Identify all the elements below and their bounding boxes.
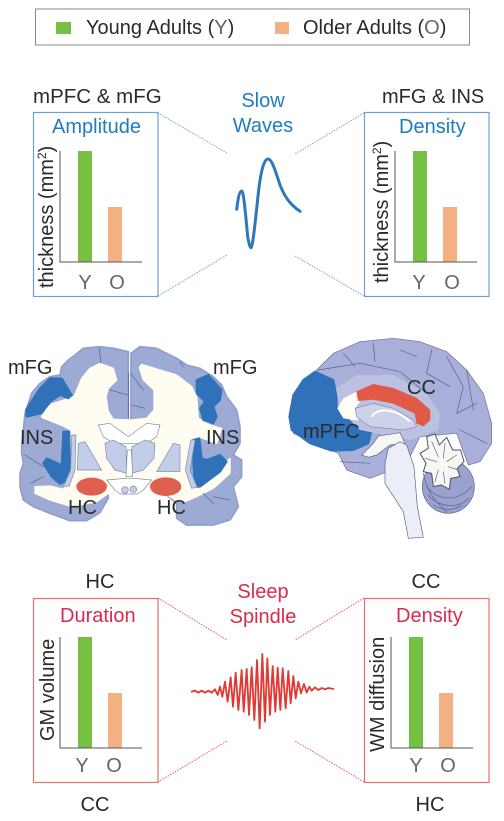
labels on coronal section: mFG: [8, 357, 52, 379]
labels on coronal section: HC: [157, 497, 186, 519]
left insula (blue): [43, 432, 70, 484]
panel: density (slow waves): thickness (mm: [371, 154, 393, 283]
panel: duration: GM volume: [37, 639, 59, 741]
sulci: [25, 348, 230, 503]
icon: slow wave trace: [237, 159, 300, 248]
connector lines: sleep spindle: [158, 598, 364, 782]
right hippocampus (red): [150, 477, 181, 496]
panel: density (slow waves): ): [371, 141, 393, 147]
region label: CC top: CC: [412, 571, 440, 593]
labels on coronal section: mFG: [213, 357, 257, 379]
diencephalon: [355, 403, 417, 430]
panel: amplitude: O: [109, 272, 125, 294]
panel: density (slow waves): O: [444, 272, 460, 294]
panel: density (slow waves): [364, 112, 489, 296]
right white matter: [131, 364, 230, 502]
white genu: [337, 392, 360, 421]
brain: sagittal section: [289, 338, 492, 538]
icon: sleep spindle trace: [192, 654, 333, 728]
heading: sleep spindle: Spindle: [230, 606, 296, 628]
right hemisphere cortex: [131, 347, 242, 525]
brainstem: [385, 442, 423, 538]
region label: mPFC and mFG: mPFC & mFG: [33, 85, 162, 108]
panel: amplitude: ): [36, 146, 58, 152]
panel: density (slow waves): Density: [399, 116, 466, 138]
gyri lines: [318, 343, 487, 463]
cerebellum: [422, 460, 474, 513]
panel: density (spindle): [364, 598, 489, 782]
labels on sagittal section: mPFC: [303, 421, 360, 443]
region label: HC top: HC: [86, 571, 114, 593]
legend: [36, 9, 470, 45]
region label: CC bottom: CC: [81, 794, 109, 816]
right insula (blue): [193, 438, 227, 487]
left middle frontal gyrus (blue): [26, 378, 72, 417]
panel: duration: Duration: [60, 605, 136, 627]
inner band: [336, 375, 440, 440]
region label: mFG and INS: mFG & INS: [382, 86, 484, 108]
left white matter: [35, 363, 129, 507]
heading: slow waves: Waves: [233, 115, 293, 137]
panel: duration: O: [106, 755, 122, 777]
cerebellar white matter: [420, 434, 464, 489]
heading: slow waves: Slow: [241, 90, 285, 112]
panel: density (slow waves): 2: [370, 147, 384, 154]
region label: HC bottom: HC: [416, 794, 444, 816]
deep structures: [63, 423, 197, 494]
panel: amplitude: 2: [35, 152, 49, 159]
labels on coronal section: INS: [206, 427, 239, 449]
left hippocampus (red): [76, 478, 107, 496]
legend: Older Adults (O): [303, 17, 446, 39]
fornix: [372, 410, 410, 422]
labels on coronal section: HC: [68, 497, 97, 519]
panel: amplitude: thickness (mm: [36, 159, 58, 288]
panel: density (slow waves): Y: [412, 272, 426, 294]
panel: density (spindle): O: [440, 755, 456, 777]
panel: duration: Y: [75, 755, 89, 777]
labels on sagittal section: CC: [407, 377, 436, 399]
labels on sagittal section: [303, 377, 436, 443]
legend: Young Adults (Y): [86, 17, 234, 39]
panel: amplitude: Amplitude: [52, 116, 141, 138]
hypothalamic white structure: [362, 433, 405, 457]
panel: amplitude: [34, 112, 158, 296]
labels on coronal section: [8, 357, 257, 519]
medial prefrontal cortex (blue): [289, 372, 372, 451]
panel: density (spindle): Density: [396, 605, 463, 627]
right middle frontal gyrus (blue): [197, 375, 222, 423]
panel: amplitude: Y: [78, 272, 92, 294]
brain: coronal section: [20, 347, 242, 525]
cerebrum: [290, 338, 492, 478]
panel: duration: [34, 598, 158, 782]
left hemisphere cortex: [20, 347, 128, 521]
corpus callosum (red): [357, 384, 430, 426]
connector lines: slow waves: [158, 113, 364, 296]
labels on coronal section: INS: [20, 427, 53, 449]
heading: sleep spindle: Sleep: [237, 581, 289, 603]
panel: density (spindle): Y: [409, 755, 423, 777]
panel: density (spindle): WM diffusion: [367, 637, 389, 752]
